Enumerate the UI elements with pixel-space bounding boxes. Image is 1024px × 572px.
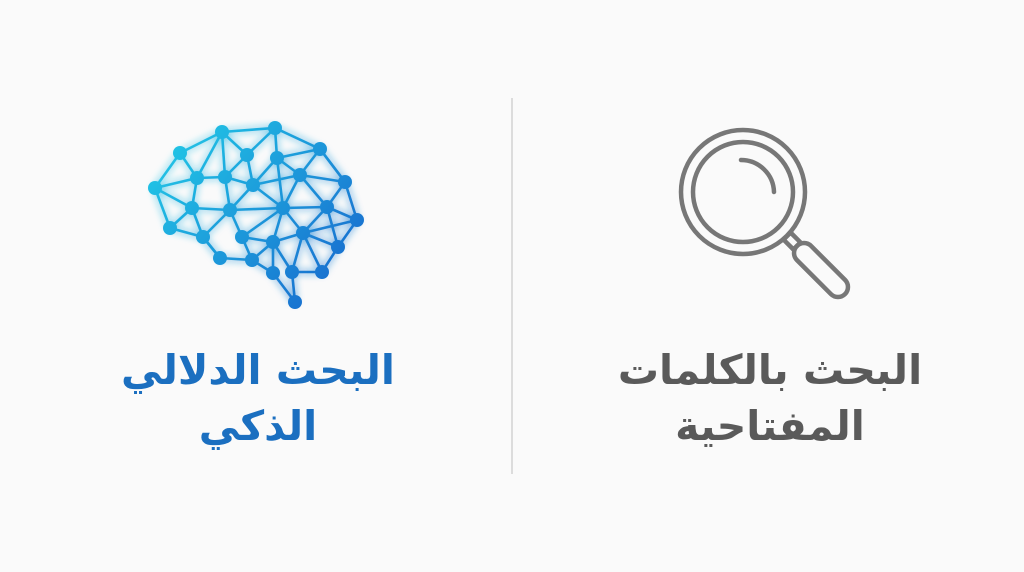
heading: semantic search: الذكي (199, 402, 317, 450)
heading: semantic search (121, 346, 395, 450)
heading: semantic search: البحث الدلالي (121, 346, 395, 394)
heading: keyword search: المفتاحية (675, 402, 865, 450)
icon: network brain (148, 120, 364, 309)
heading: keyword search: البحث بالكلمات (618, 346, 922, 394)
icon: magnifying glass (678, 128, 850, 300)
heading: keyword search (618, 346, 922, 450)
divider (511, 98, 513, 474)
